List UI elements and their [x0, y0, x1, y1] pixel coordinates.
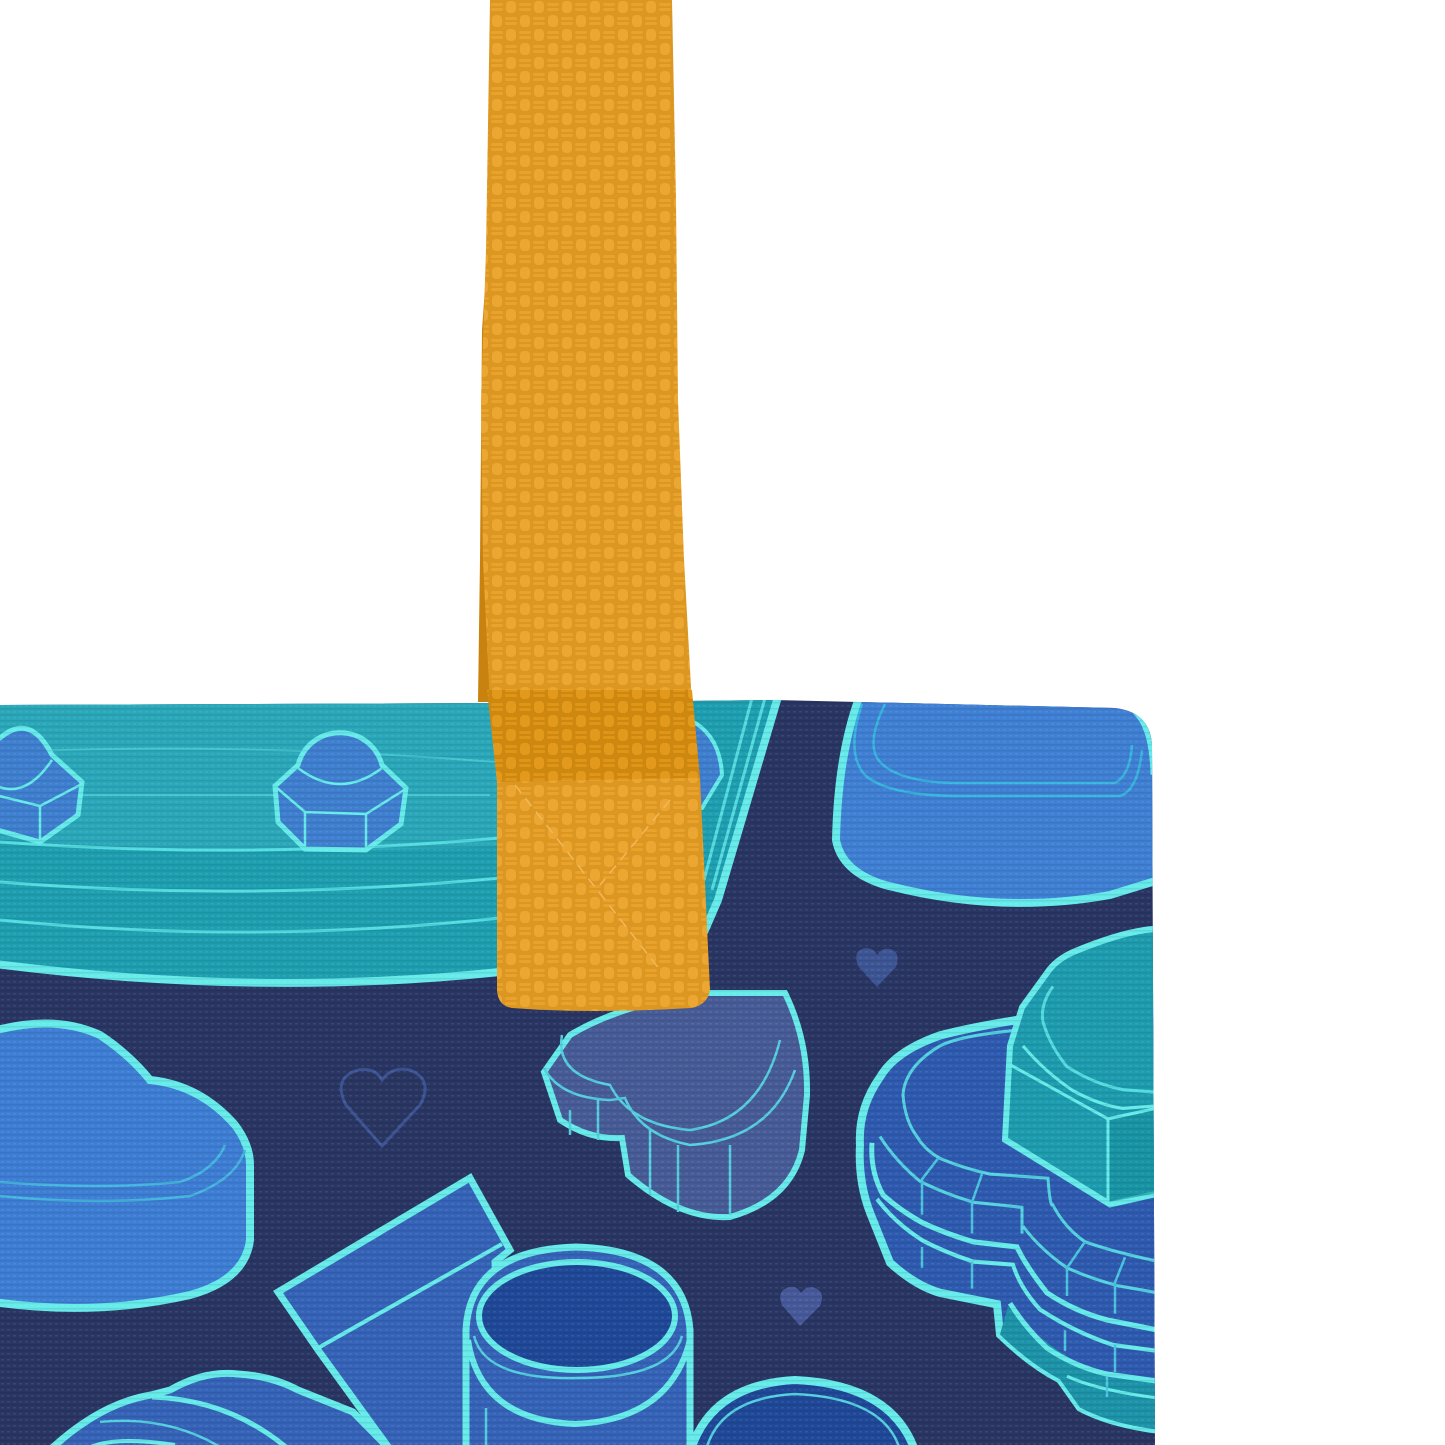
icon: hex nut left	[0, 728, 82, 842]
icon: muted heart block center	[544, 993, 807, 1217]
teal band with curved lines	[0, 690, 780, 983]
icon: blue cloud heart left	[0, 1024, 250, 1308]
handle shade above fold	[487, 690, 700, 782]
disc rim lines	[903, 1030, 1175, 1265]
icon: hex nut center	[275, 733, 406, 850]
icon: nut behind handle	[690, 720, 722, 808]
fabric canvas texture	[0, 695, 1160, 1445]
icon: faint heart right of handle	[856, 948, 898, 987]
icon: heart block bottom left	[30, 1373, 410, 1445]
icon: cup bottom right	[686, 1380, 920, 1445]
product photo: tote bag corner with handle	[0, 0, 1155, 1445]
panel: orange fabric handle	[478, 0, 710, 1011]
handle strap	[481, 0, 700, 782]
disc brick lines	[922, 1158, 1125, 1397]
panel: tote bag fabric	[0, 690, 1175, 1445]
icon: stacked disc	[860, 1017, 1175, 1431]
teal underside of disc	[1000, 1306, 1155, 1430]
disc silhouette	[860, 1017, 1175, 1431]
fabric navy base	[0, 695, 1160, 1445]
icon: cylinder cup	[466, 1247, 690, 1445]
fold stitching X	[515, 785, 670, 970]
handle back fold	[478, 190, 500, 702]
icon: small heart bottom	[780, 1287, 822, 1326]
icon: rectangular block	[278, 1178, 510, 1445]
handle stitched fold	[497, 778, 710, 1011]
icon: blue heart block top right	[836, 690, 1175, 903]
icon: outline heart	[341, 1069, 425, 1146]
icon: teal nut on stack	[1005, 929, 1175, 1204]
